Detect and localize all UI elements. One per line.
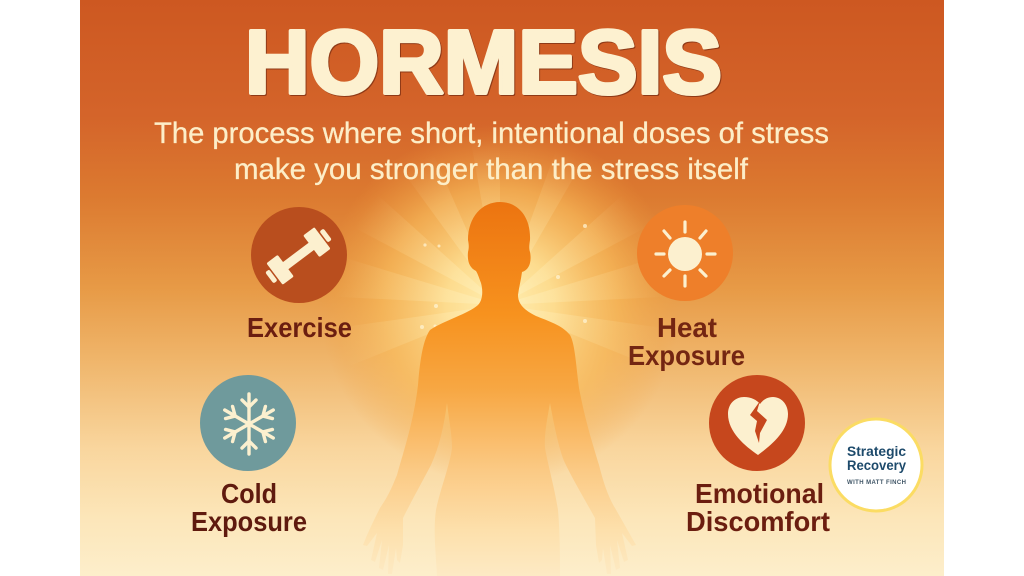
icon: sun [637, 205, 733, 301]
label: exercise: Exercise [247, 312, 352, 343]
title: HORMESIS [245, 13, 722, 113]
icon: broken heart [709, 375, 805, 471]
label: emotional discomfort [686, 478, 830, 537]
subtitle: make you stronger than the stress itself [234, 153, 749, 186]
item: exercise [247, 207, 352, 343]
subtitle: The process where short, intentional doses of stress [154, 117, 829, 150]
title: HORMESIS [246, 14, 723, 114]
label: heat exposure: Heat [657, 312, 717, 343]
icon: snowflake [200, 375, 296, 471]
icon: dumbbell [251, 207, 347, 303]
item: heat exposure [628, 205, 745, 371]
logo badge [830, 419, 922, 511]
label: heat exposure [628, 312, 745, 371]
logo badge: Recovery [847, 458, 906, 473]
item: emotional discomfort [686, 375, 830, 537]
label: cold exposure: Cold [221, 478, 277, 509]
sunburst behind figure [300, 105, 700, 485]
subtitle [154, 117, 829, 186]
label: heat exposure: Exposure [628, 340, 745, 371]
item: cold exposure [191, 375, 307, 537]
figure silhouette [363, 202, 636, 576]
logo badge: Strategic [847, 444, 906, 459]
label: emotional discomfort: Discomfort [686, 506, 830, 537]
label: cold exposure [191, 478, 307, 537]
logo badge: WITH MATT FINCH [847, 480, 906, 486]
label: cold exposure: Exposure [191, 506, 307, 537]
label: emotional discomfort: Emotional [695, 478, 824, 509]
